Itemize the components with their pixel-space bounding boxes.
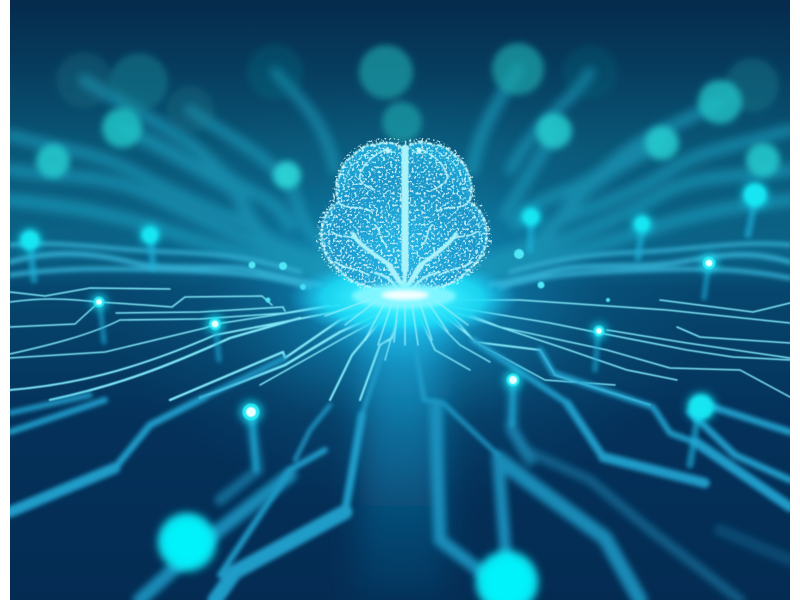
brain inner rim bbox=[329, 150, 480, 272]
node glows bbox=[19, 182, 768, 600]
node white cores bbox=[96, 260, 712, 417]
bottom out-of-focus fibres bbox=[140, 385, 790, 600]
brain outline bbox=[321, 143, 487, 291]
halo behind brain bbox=[182, 169, 625, 456]
brain silhouette: left and right hemispheres bbox=[321, 143, 487, 291]
brain speckle texture bbox=[316, 138, 492, 293]
brain central stem and branches bbox=[353, 148, 456, 292]
glowing nodes bbox=[19, 182, 768, 600]
lower blurred fibres bbox=[10, 340, 790, 600]
mid fibres bbox=[10, 244, 790, 288]
radiating rays under base bbox=[325, 300, 468, 345]
brain folds bbox=[332, 148, 476, 276]
glowing base under brain bbox=[292, 270, 514, 336]
upper blurred fibres bbox=[10, 69, 790, 280]
large near nodes bbox=[162, 517, 534, 600]
base hot spot bbox=[381, 290, 429, 300]
node stems bbox=[30, 200, 755, 470]
central light beam bbox=[355, 300, 448, 600]
out-of-focus background nodes bbox=[36, 43, 780, 189]
sharp thin circuit lines left bbox=[10, 288, 400, 400]
base bloom bbox=[352, 284, 456, 308]
node bodies bbox=[21, 184, 766, 419]
small nodes bbox=[248, 249, 610, 302]
brain bbox=[316, 138, 492, 293]
near-focus node bodies bbox=[94, 256, 716, 420]
sharp thin circuit lines right bbox=[420, 300, 790, 405]
bright brain base glow bbox=[352, 284, 456, 308]
